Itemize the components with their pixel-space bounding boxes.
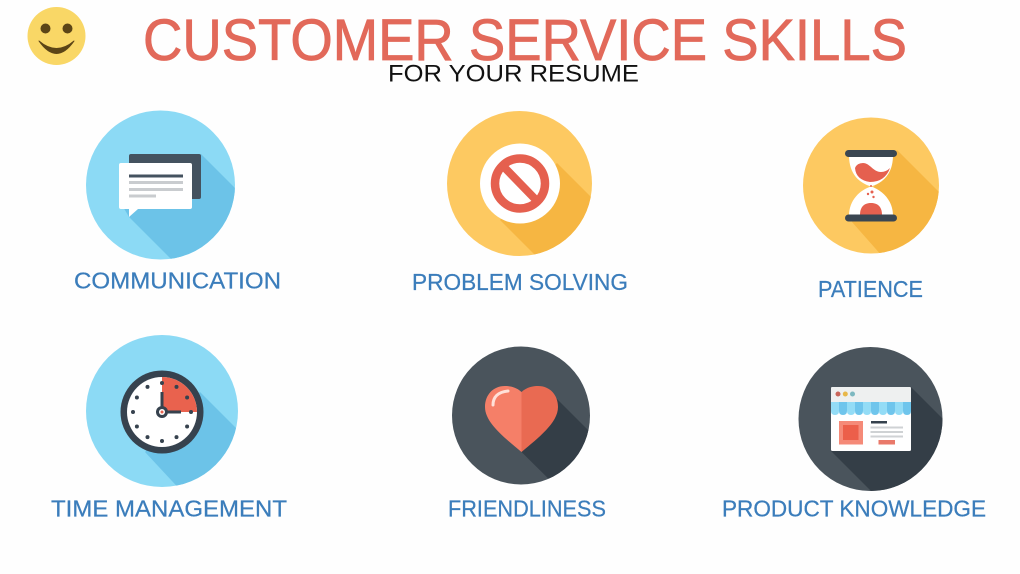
icon: hourglass [803,118,939,254]
label: friendliness: FRIENDLINESS [448,496,606,522]
subtitle: FOR YOUR RESUME [388,60,639,88]
panel: product knowledge [722,347,986,522]
panel: problem solving [412,111,628,295]
panel: communication [74,110,281,294]
icon: heart [452,346,590,484]
label: time management: TIME MANAGEMENT [51,496,287,522]
panel: time management [51,335,287,522]
icon: web shop window [798,347,942,491]
icon: clock [86,335,245,495]
icon: speech bubbles [86,110,235,260]
icon: prohibition sign [447,111,592,256]
panel: friendliness [448,346,606,522]
label: communication: COMMUNICATION [74,268,281,294]
label: product knowledge: PRODUCT KNOWLEDGE [722,496,986,522]
label: problem solving: PROBLEM SOLVING [412,269,628,295]
label: patience: PATIENCE [818,276,923,302]
title: CUSTOMER SERVICE SKILLS [143,8,907,73]
panel: patience [803,118,945,302]
icon: smiley face [28,7,86,65]
